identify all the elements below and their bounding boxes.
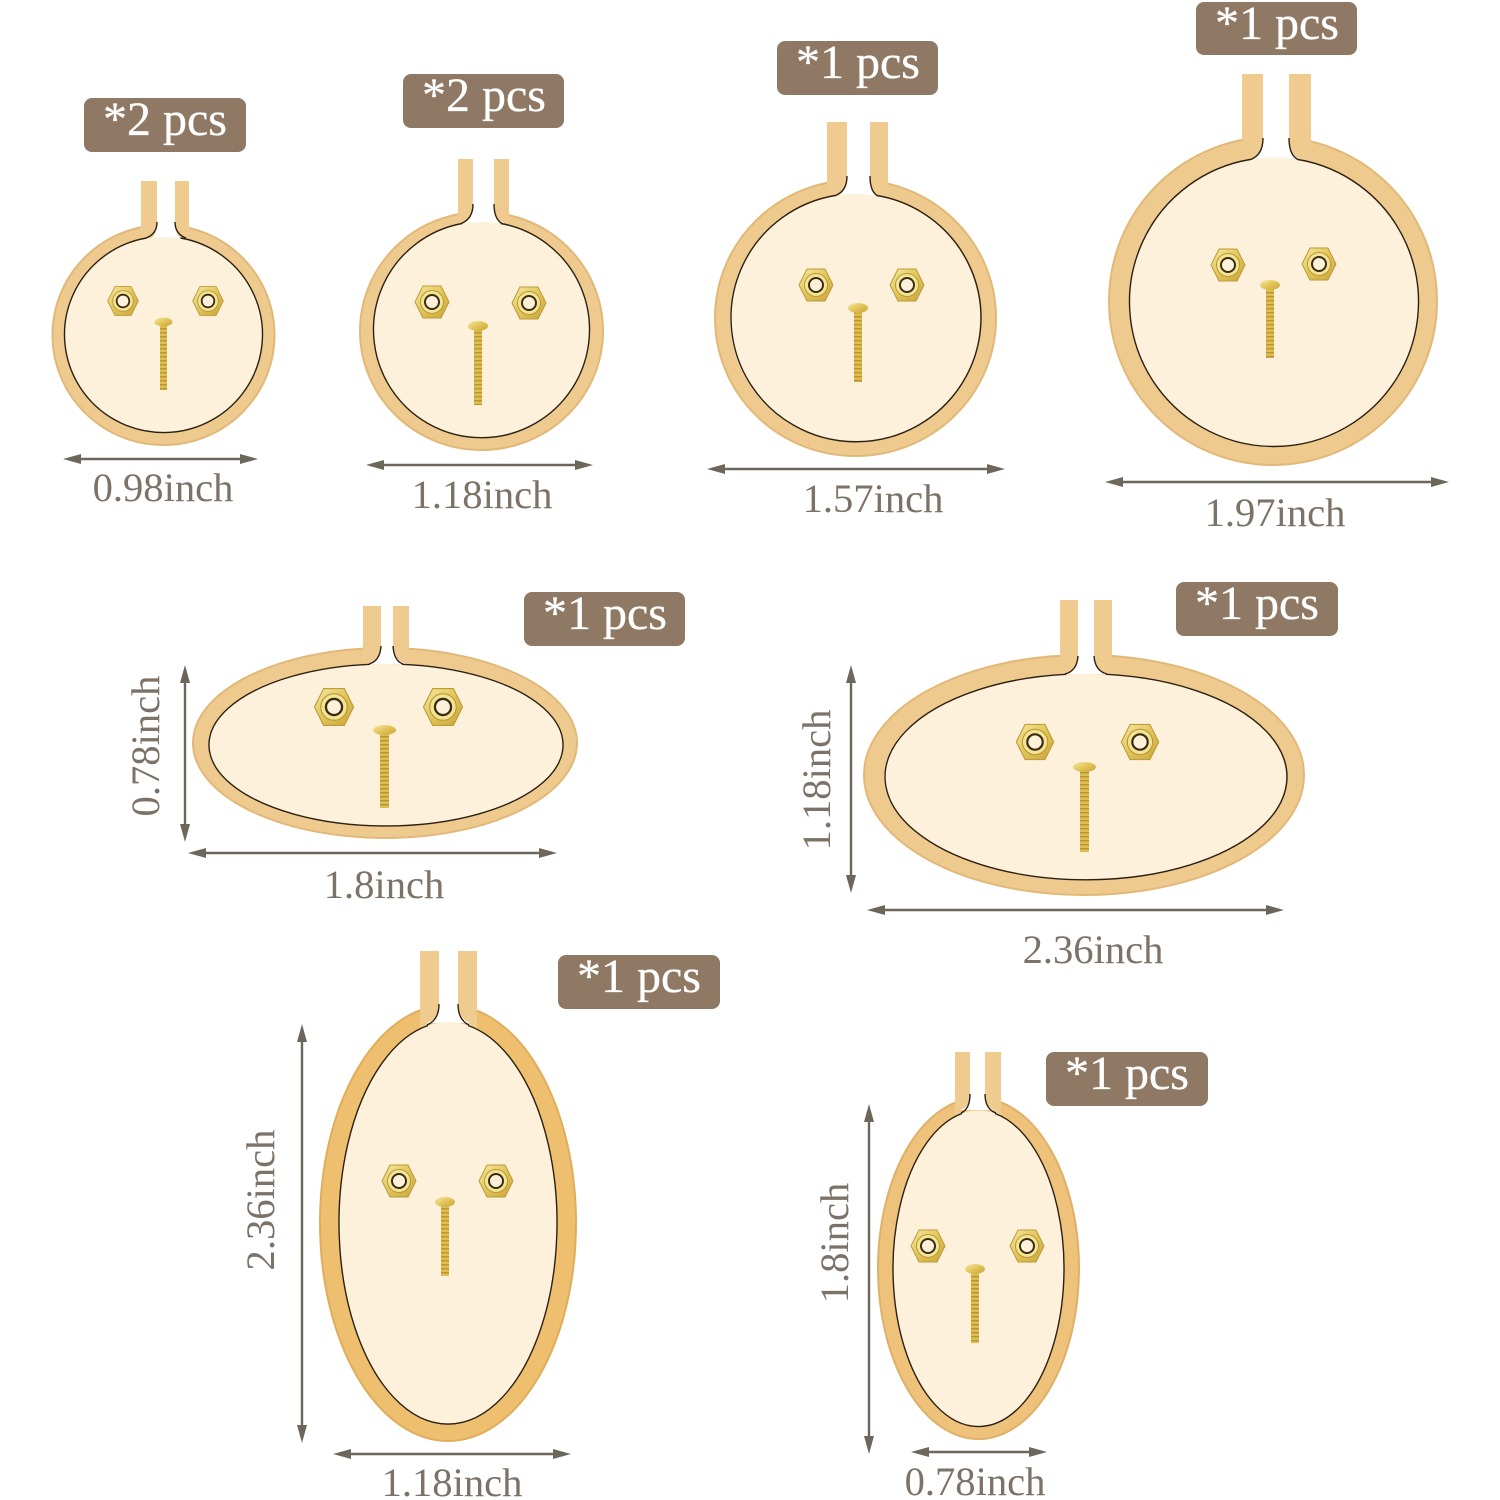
dimension label: 0.98inch [93, 465, 233, 510]
quantity badge: 2 pcs: *2 pcs [422, 69, 546, 122]
dimension label: 1.57inch [803, 476, 943, 521]
wooden hoop horizontal oval small [193, 606, 577, 838]
hoop group: 2.36 x 1.18 inch horizontal oval [794, 577, 1338, 972]
wooden hoop 1.18 inch [360, 159, 603, 450]
wooden hoop 1.57 inch [715, 122, 996, 456]
quantity badge: 1 pcs: *1 pcs [577, 950, 701, 1003]
dimension arrow: width [1105, 477, 1449, 487]
dimension arrow: width [366, 460, 593, 470]
hoop group: 1.57 inch round [707, 36, 1005, 521]
quantity badge: 1 pcs: *1 pcs [796, 36, 920, 89]
quantity badge: 1 pcs [777, 36, 938, 95]
dimension arrow: height [864, 1104, 874, 1454]
dimension arrow: width [188, 848, 557, 858]
quantity badge: 1 pcs [1176, 577, 1338, 636]
quantity badge: 1 pcs [1046, 1047, 1208, 1106]
hoop group: 1.8 x 0.78 inch horizontal oval [123, 587, 685, 907]
wooden hoop 0.98 inch [52, 181, 274, 445]
dimension arrow: width [63, 454, 258, 464]
wooden hoop vertical oval large [320, 951, 576, 1441]
dimension arrow: width [333, 1449, 571, 1459]
wooden hoop horizontal oval large [864, 600, 1304, 895]
dimension arrow: width [707, 464, 1005, 474]
dimension arrow: height [180, 665, 190, 842]
hoop group: 1.18 inch round [360, 69, 603, 517]
dimension arrow: height [297, 1024, 307, 1443]
dimension label: height: 0.78inch [123, 676, 168, 816]
dimension label: height: 2.36inch [238, 1130, 283, 1270]
hoop group: 1.8 x 0.78 inch vertical oval [812, 1047, 1208, 1500]
quantity badge: 2 pcs: *2 pcs [103, 93, 227, 146]
dimension label: height: 1.8inch [812, 1183, 857, 1303]
hoop group: 2.36 x 1.18 inch vertical oval [238, 950, 720, 1500]
dimension arrow: height [846, 665, 856, 893]
quantity badge: 1 pcs: *1 pcs [543, 587, 667, 640]
dimension label: height: 1.18inch [794, 710, 839, 850]
quantity badge: 2 pcs [403, 69, 564, 128]
quantity badge: 1 pcs [524, 587, 685, 646]
dimension label: width: 2.36inch [1023, 927, 1163, 972]
dimension label: 1.18inch [412, 472, 552, 517]
hoop group: 1.97 inch round [1105, 0, 1449, 535]
quantity badge: 2 pcs [84, 93, 246, 152]
dimension label: width: 1.8inch [324, 862, 444, 907]
quantity badge: 1 pcs [558, 950, 720, 1009]
wooden hoop vertical oval small [878, 1052, 1079, 1439]
quantity badge: 1 pcs: *1 pcs [1065, 1047, 1189, 1100]
dimension arrow: width [867, 905, 1284, 915]
hoop group: 0.98 inch round [52, 93, 274, 510]
wooden hoop 1.97 inch [1109, 74, 1437, 465]
dimension label: 1.97inch [1205, 490, 1345, 535]
dimension arrow: width [911, 1447, 1047, 1457]
quantity badge: 1 pcs: *1 pcs [1195, 577, 1319, 630]
